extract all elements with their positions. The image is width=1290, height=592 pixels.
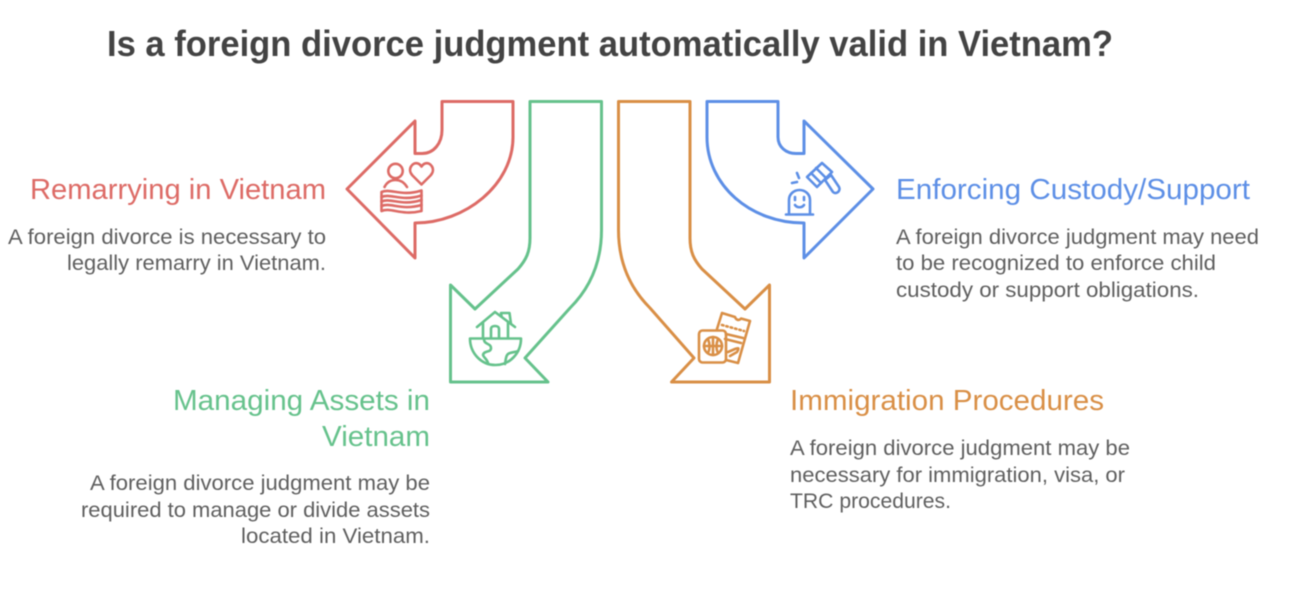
icon: person, heart and flag: [382, 163, 433, 213]
icon: house on globe: [470, 312, 521, 365]
heading: assets: [173, 385, 430, 453]
arrow: custody (blue): [707, 102, 873, 258]
text: assets: required to manage or divide assets: [81, 499, 430, 522]
text: custody: A foreign divorce judgment may need: [896, 226, 1259, 249]
icon: gavel and bell: [786, 163, 839, 214]
arrow: remarrying (red): [347, 102, 513, 258]
text: assets: [81, 472, 430, 548]
text: immigration: TRC procedures.: [790, 490, 951, 513]
icon: passport and ticket: [699, 313, 750, 363]
text: immigration: necessary for immigration, visa, or: [790, 464, 1125, 487]
panel: remarrying: [8, 174, 326, 275]
text: assets: A foreign divorce judgment may be: [90, 472, 430, 495]
heading: assets: Managing Assets in: [173, 385, 430, 417]
title: Is a foreign divorce judgment automatically valid in Vietnam?: [107, 23, 1113, 64]
heading: remarrying: Remarrying in Vietnam: [30, 174, 326, 206]
text: remarrying: legally remarry in Vietnam.: [67, 252, 326, 275]
text: immigration: A foreign divorce judgment may be: [790, 437, 1130, 460]
panel: custody: [896, 174, 1259, 302]
panel: immigration: [790, 385, 1130, 513]
text: immigration: [790, 437, 1130, 513]
text: custody: [896, 226, 1259, 302]
text: remarrying: A foreign divorce is necessary to: [8, 226, 326, 249]
text: assets: located in Vietnam.: [241, 525, 430, 548]
panel: assets: [81, 385, 430, 548]
heading: immigration: Immigration Procedures: [790, 385, 1104, 417]
arrow: immigration (orange): [618, 102, 770, 382]
heading: custody: Enforcing Custody/Support: [896, 174, 1250, 206]
text: custody: custody or support obligations.: [896, 279, 1199, 302]
heading: assets: Vietnam: [322, 421, 430, 453]
text: remarrying: [8, 226, 326, 275]
arrow: assets (green): [450, 102, 602, 382]
text: custody: to be recognized to enforce child: [896, 252, 1216, 275]
